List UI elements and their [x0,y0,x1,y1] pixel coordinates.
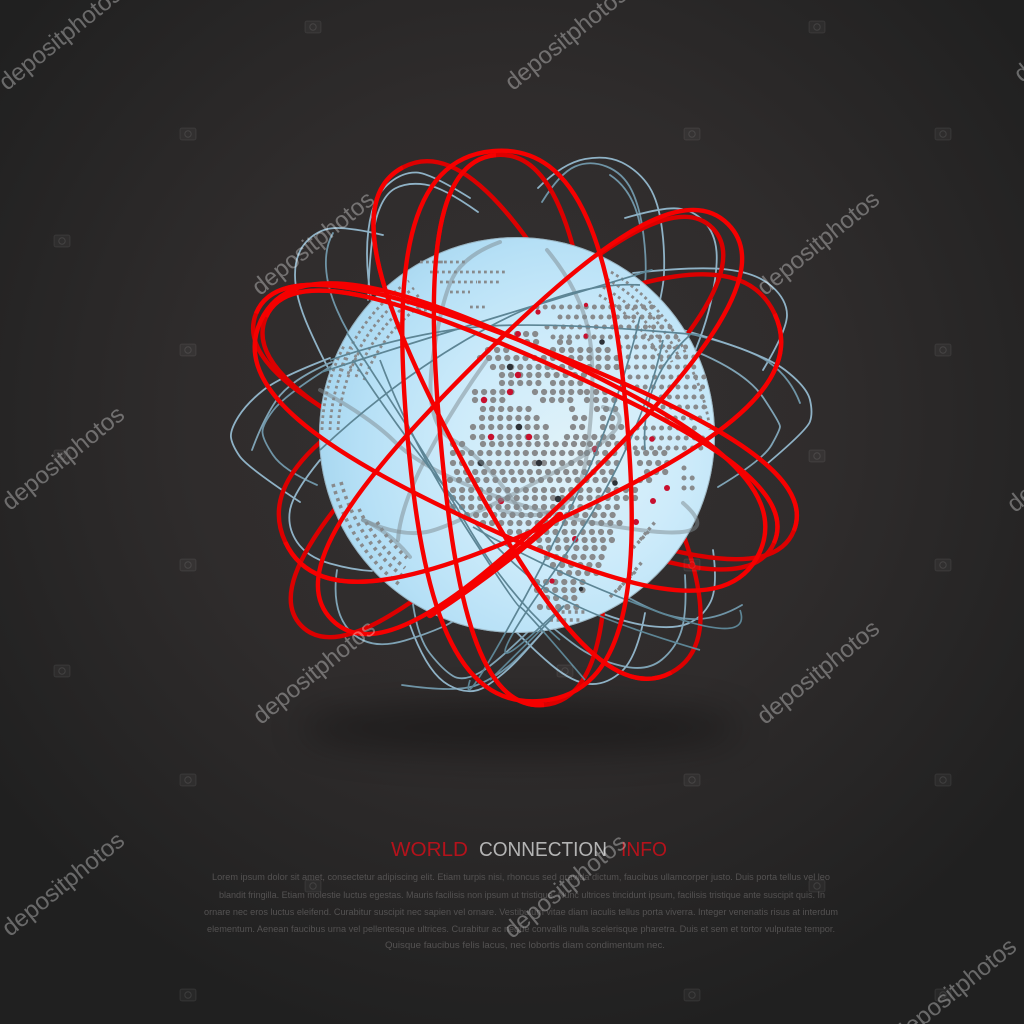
orbit: near-vertical, left arc [416,155,544,712]
body paragraph: elementum. Aenean faucibus urna vel pellentesque ultrices. Curabitur ac neque convallis nulla scelerisque pharetra. Duis et sem et tortor vulputate tempor. [207,924,835,934]
translucent gray orbit bands on globe [320,242,697,557]
dotted map: limb arcs top left [322,262,505,430]
orbit: tilted left, full ring [275,167,785,677]
orbit: shallow tilted, lower arc [285,314,815,628]
globe [319,237,715,633]
body paragraph: ornare nec eros luctus eleifend. Curabitur suscipit nec sapien vel ornare. Vestibulum vitae diam iaculis tellus porta viverra. Integer venenatis risus at interdum [204,907,838,917]
dark highlight dots [478,339,618,591]
watermark text: depositphotos [499,829,632,944]
dotted map: limb arcs top right [599,272,710,430]
orbit: tilted right, upper arc [256,245,822,531]
watermark text: depositphotos [0,827,130,942]
heading: INFO [621,839,667,861]
body paragraph: Quisque faucibus felis lacus, nec lobortis diam condimentum nec. [385,940,665,950]
thin orbit lines across globe [320,270,741,690]
heading: CONNECTION [479,839,607,861]
orbit: tilted right, full ring [222,237,798,637]
watermark text: depositphotos [752,186,885,301]
orbit: steep tilted, left arc [328,167,671,712]
back orbit lines: thin blue-gray [231,158,812,691]
dotted map: limb block lower left [333,482,407,585]
watermark text: depositphotos [247,186,380,301]
orbit: thick convergence segment [430,515,560,615]
back red orbits [228,128,822,712]
dotted map: east region [537,307,710,488]
heading: WORLD [391,839,468,861]
orbit: tilted right, second upper arc [266,251,803,543]
watermark text: depositphotos [0,401,130,516]
dotted map: islands lower right [550,522,655,620]
orbit: near-vertical, full ring [383,141,651,711]
front red orbits [222,141,822,712]
watermark text: depositphotos [752,615,885,730]
watermark text: depositphotos [248,615,381,730]
heading [391,839,667,861]
body paragraph: blandit fringilla. Etiam molestie luctus egestas. Mauris facilisis non ipsum ut tristique. Nunc ultrices tincidunt ipsum, facilisis tristique ante suscipit quis. In [219,890,825,900]
body paragraph [204,872,838,950]
red highlight dots [481,303,670,584]
dotted map: central continent [450,334,671,607]
floor shadow [300,704,740,752]
body paragraph: Lorem ipsum dolor sit amet, consectetur adipiscing elit. Etiam turpis nisi, rhoncus sed gravida dictum, faucibus ullamcorper justo. Duis porta tellus vel leo [212,872,830,882]
